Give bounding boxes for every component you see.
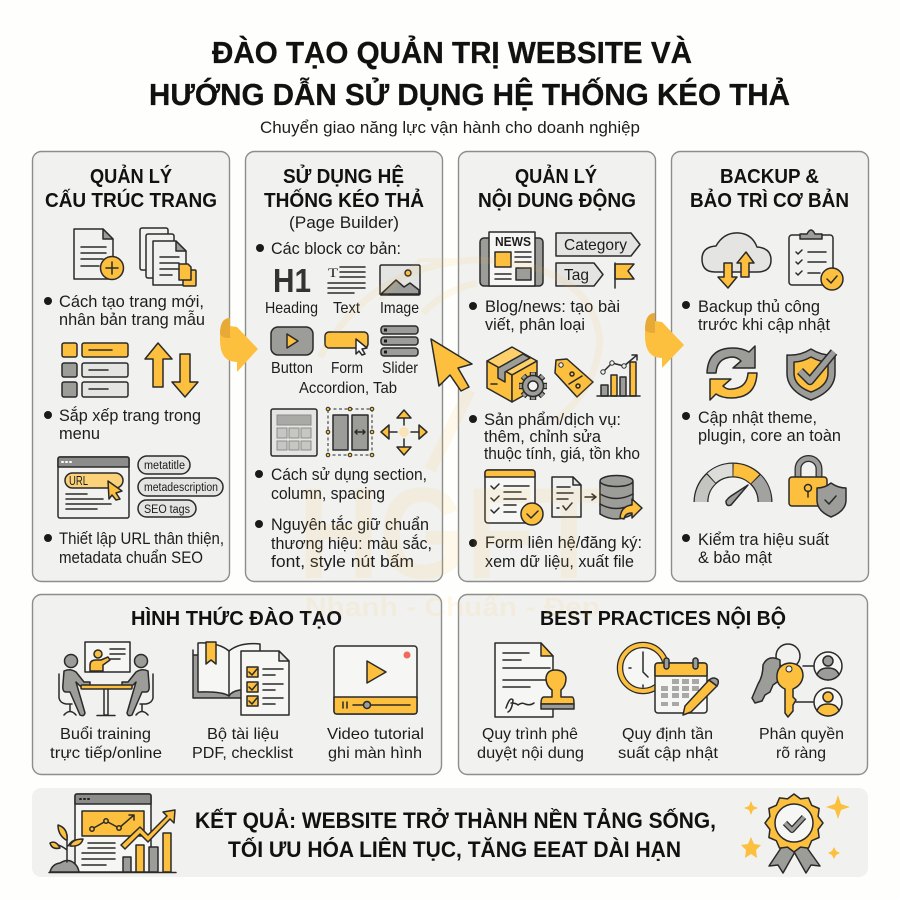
bullet: section column spacing: Cách sử dụng section, [271,465,427,484]
tags: SEO: metatitle [144,460,185,472]
bullet: cập nhật theme: Cập nhật theme, [698,408,817,427]
block: image [380,265,420,317]
icon: flag [615,263,634,288]
bullet: tạo trang [44,292,205,329]
title [149,34,790,112]
bullet: hiệu suất bảo mật: & bảo mật [698,548,772,567]
title: HƯỚNG DẪN SỬ DỤNG HỆ THỐNG KÉO THẢ [149,76,790,112]
heading: page builder: (Page Builder) [289,213,399,232]
panel: hình thức đào tạo [32,594,442,774]
bullet: backup thủ công [682,297,830,334]
block: button [271,327,313,377]
icon: clipboard [789,230,843,290]
bullet: sản phẩm: thêm, chỉnh sửa [484,427,602,446]
heading: hình thức: HÌNH THỨC ĐÀO TẠO [131,606,342,630]
bullet: sắp xếp [44,406,201,443]
bullet: thương hiệu: thương hiệu: màu sắc, [271,534,432,553]
icon: form checklist [485,470,543,525]
icon: approval document [495,643,574,717]
label: phê duyệt [477,726,584,762]
icon: duplicate pages [140,228,196,286]
heading: cấu trúc trang: CẤU TRÚC TRANG [45,188,217,212]
icon: video player [334,646,417,714]
block: slider [381,326,418,377]
bullet: thương hiệu [255,515,432,571]
icon: URL browser [58,457,129,518]
heading: nội dung động [478,164,636,212]
block: heading: Heading [265,300,318,317]
icon: live training [59,642,153,716]
heading: page builder: SỬ DỤNG HỆ [283,164,404,188]
subtitle: Chuyển giao năng lực vận hành cho doanh nghiệp [260,118,640,137]
tag: tag [556,263,603,286]
label: phân quyền: Phân quyền [759,726,844,743]
panel: quản lý nội dung động [458,152,656,582]
icon: newspaper: NEWS [495,234,531,249]
bullet: form liên hệ: xem dữ liệu, xuất file [485,552,634,571]
bullet: form liên hệ [469,533,642,571]
label: video [327,726,424,762]
block: text [328,265,365,317]
bullet: hiệu suất bảo mật [682,530,829,567]
icon: price tag [555,359,593,397]
icon: section grid [271,409,317,456]
bullet: thương hiệu: Nguyên tắc giữ chuẩn [271,515,429,534]
bullet: sắp xếp: Sắp xếp trang trong [59,406,201,425]
watermark: Nhanh - Chuẩn - Đẹp [305,592,600,622]
icon: cloud backup [702,233,771,288]
icon: columns [326,407,374,457]
panel: quản lý cấu trúc trang [32,152,230,582]
icon: spacing arrows [381,410,427,455]
tag: category: Category [564,237,627,254]
tags: SEO: SEO tags [144,504,190,516]
bullet: thương hiệu: font, style nút bấm [271,552,414,571]
block: heading: H1 [273,262,311,299]
label: tài liệu: Bộ tài liệu [207,726,279,743]
bullet: blog news [469,297,620,334]
label: tài liệu [192,726,294,762]
icon: performance gauge [701,470,765,506]
tag: tag: Tag [564,267,589,284]
heading: best practices: BEST PRACTICES NỘI BỘ [540,606,786,630]
bullet: sản phẩm: Sản phẩm/dịch vụ: [484,410,621,429]
bullet: URL thân thiện: Thiết lập URL thân thiện, [59,529,224,548]
icon: website growth [49,794,176,872]
bullet: blog news: Blog/news: tạo bài [485,297,620,316]
bullet: block cơ bản: Các block cơ bản: [271,239,401,258]
bullet: blog news: viết, phân loại [485,315,585,334]
label: tài liệu: PDF, checklist [192,745,294,762]
block: slider: Slider [382,360,418,377]
panel: backup và bảo trì [672,152,868,582]
heading: nội dung động: QUẢN LÝ [515,164,597,188]
heading: backup: BẢO TRÌ CƠ BẢN [690,189,849,212]
icon: sort arrows [145,343,198,397]
label: training: Buổi training [60,725,151,743]
block: text: T [328,265,338,280]
label: training: trực tiếp/online [50,745,162,762]
bullet: section column spacing [255,465,427,503]
icon: keys and users [752,644,842,717]
heading: cấu trúc trang [45,164,217,212]
block: image: Image [380,300,419,317]
title: ĐÀO TẠO QUẢN TRỊ WEBSITE VÀ [212,34,692,70]
bullet: sản phẩm: thuộc tính, giá, tồn kho [484,444,640,463]
block: text: Text [333,300,361,317]
label: video: Video tutorial [327,726,424,743]
block: heading [265,262,318,317]
label: tần suất [618,726,719,762]
watermark: HGFT [298,460,603,606]
result text: TỐI ƯU HÓA LIÊN TỤC, TĂNG EEAT DÀI HẠN [228,836,681,862]
icon: product box [487,347,537,402]
label: phê duyệt: duyệt nội dung [477,745,584,762]
label: video: ghi màn hình [328,745,422,762]
tag: category [556,233,640,256]
bullet: section column spacing: column, spacing [271,484,385,503]
result text [195,807,716,862]
bullet: cập nhật theme [682,408,841,445]
icon: gear [519,372,547,400]
bullet: sắp xếp: menu [59,424,100,443]
icon: URL browser: URL [69,474,88,488]
icon: sync [707,346,757,400]
label: phê duyệt: Quy trình phê [482,726,578,743]
bullet: hiệu suất bảo mật: Kiểm tra hiệu suất [698,530,829,549]
bullet: form liên hệ: Form liên hệ/đăng ký: [485,533,642,552]
heading: cấu trúc trang: QUẢN LÝ [90,164,172,188]
icon: newspaper [480,232,543,286]
icon: menu rows [62,343,128,397]
bullet: URL thân thiện: metadata chuẩn SEO [59,548,203,567]
heading: nội dung động: NỘI DUNG ĐỘNG [478,188,636,212]
panel: kết quả [32,788,868,877]
icon: doc to database [552,476,642,519]
heading: page builder [264,164,424,232]
bullet: tạo trang: Cách tạo trang mới, [59,292,204,311]
label: tần suất: suất cập nhật [618,745,719,762]
bullet: backup thủ công: trước khi cập nhật [698,315,830,334]
bullet: URL thân thiện [44,529,224,567]
icon: sparkles [741,795,850,859]
label: accordion, tab: Accordion, Tab [299,380,397,397]
heading: page builder: THỐNG KÉO THẢ [264,188,424,212]
tags: SEO [138,456,223,517]
panel: best practices nội bộ [458,594,868,774]
icon: growth chart [597,355,640,396]
heading: backup: BACKUP & [720,165,819,188]
icon: award badge [765,794,823,873]
label: tần suất: Quy định tần [622,726,713,743]
icon: books and checklist [193,642,289,715]
watermark [298,260,603,622]
bullet: sản phẩm [469,410,640,463]
block: form [325,332,368,377]
block: button: Button [271,360,313,377]
tags: SEO: metadescription [144,482,218,494]
bullet: backup thủ công: Backup thủ công [698,297,820,316]
block: form: Form [331,360,363,377]
result text: KẾT QUẢ: WEBSITE TRỞ THÀNH NỀN TẢNG SỐNG, [195,807,716,833]
label: phân quyền [759,726,844,762]
icon: clock and calendar [620,645,718,715]
bullet: tạo trang: nhân bản trang mẫu [59,310,205,329]
icon: lock and shield [789,458,846,517]
label: phân quyền: rõ ràng [776,745,826,762]
icon: security shield [787,349,835,400]
bullet: cập nhật theme: plugin, core an toàn [698,426,841,445]
arrow: panel 1 to panel 2 [220,318,258,372]
icon: new page [74,229,124,280]
heading: backup [690,165,849,212]
panel: sử dụng hệ thống kéo thả [246,152,442,582]
arrow: cursor between panels [431,339,472,391]
arrow: panel 3 to panel 4 [645,313,684,368]
label: training [50,725,162,762]
